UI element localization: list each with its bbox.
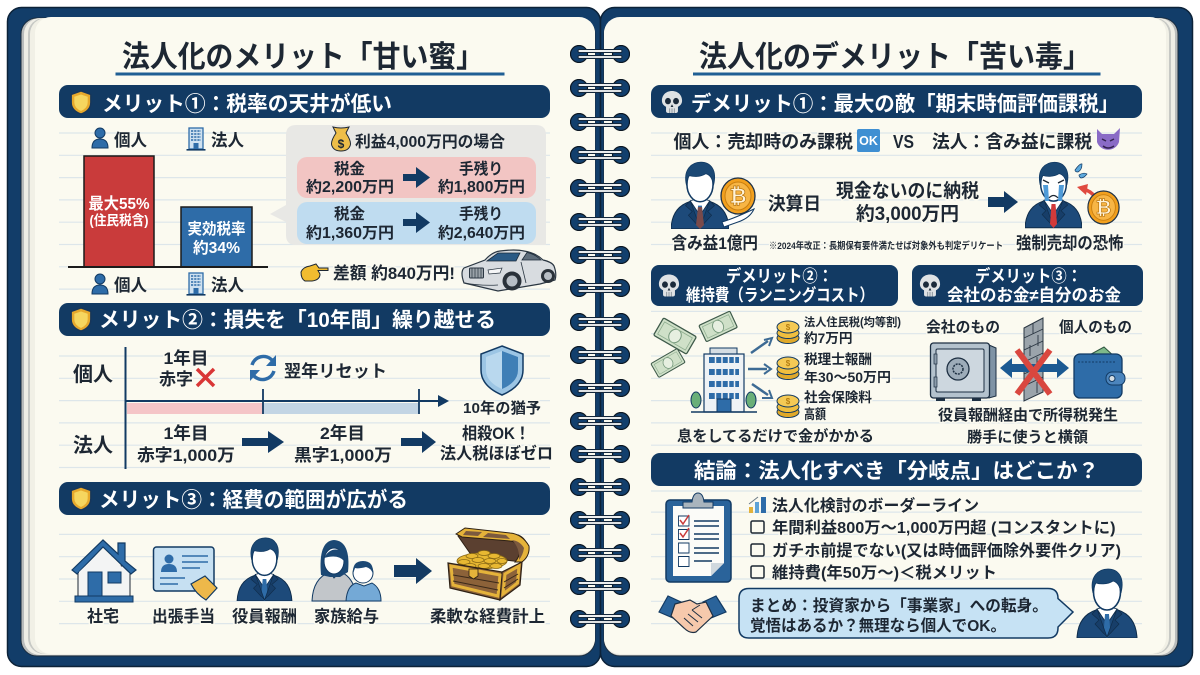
left notebook cover [8, 8, 600, 666]
scenario: unrealized gains: 決算日 [768, 193, 821, 214]
icon: office building [691, 348, 757, 412]
panel: company money vs personal money: 勝手に使うと横領 [967, 428, 1088, 446]
labels: 家族給与 [314, 606, 379, 626]
corporation sequence: 赤字1,000万 [137, 446, 235, 465]
corporation sequence [137, 423, 553, 465]
heading: merit 3: メリット③：経費の範囲が広がる [99, 488, 408, 512]
icon: bar chart [749, 497, 766, 513]
heading: demerit 1: デメリット①：最大の敵「期末時価評価課税」 [691, 92, 1119, 116]
legend top: 法人 [211, 131, 244, 150]
title: merits: 法人化のメリット「甘い蜜」 [122, 41, 484, 74]
icon: wallet [1074, 347, 1125, 398]
heading: demerit 3 [912, 265, 1143, 306]
bar: individual 55% [84, 156, 154, 267]
checklist: 維持費(年50万〜)＜税メリット [772, 563, 997, 582]
icon: skull [920, 274, 940, 296]
callout: summary speech bubble [739, 588, 1073, 638]
heading: demerit 2: デメリット②： [726, 266, 833, 286]
icon: house [72, 540, 136, 602]
left page paper stack [21, 17, 595, 656]
bar: individual 55%: 最大55% [88, 195, 150, 213]
heading: demerit 2: 維持費（ランニングコスト） [686, 285, 874, 305]
red cross [1017, 350, 1050, 394]
icon: flying bills [651, 311, 737, 378]
row: individual result: 約1,800万円 [438, 178, 525, 196]
callout: difference 8.4 million: 差額 約840万円! [333, 264, 455, 283]
row: corporation result [297, 202, 536, 244]
legend bottom: 法人 [211, 276, 244, 295]
legend top [92, 128, 244, 151]
arrow [394, 558, 432, 584]
labels: 柔軟な経費計上 [430, 607, 545, 626]
comparison line: VS [893, 132, 914, 152]
icon: refresh [250, 355, 276, 381]
right page paper stack [604, 17, 1178, 656]
corporation sequence: 相殺OK！ [462, 424, 530, 443]
panel: company money vs personal money [926, 318, 1132, 446]
icon: brick wall [1024, 318, 1043, 401]
panel: profit 40 million example: 利益4,000万円の場合 [355, 132, 505, 151]
icon: gold shield [71, 91, 91, 114]
bar: corporation 34%: 約34% [193, 239, 240, 257]
heading: conclusion [651, 453, 1142, 486]
icon: gold shield [71, 308, 91, 331]
labels [87, 606, 545, 626]
heading: conclusion: 結論：法人化すべき「分岐点」はどこか？ [694, 460, 1099, 483]
icon: travel allowance card [154, 547, 217, 600]
footnote: ※2024年改正：長期保有要件満たせば対象外も判定デリケート [769, 240, 1003, 252]
title: demerits: 法人化のデメリット「苦い毒」 [699, 40, 1091, 74]
scenario: unrealized gains: 強制売却の恐怖 [1016, 233, 1124, 253]
heading: merit 2 [59, 303, 550, 336]
comparison line: 個人：売却時のみ課税 [674, 132, 853, 152]
individual first year loss: 1年目 [164, 348, 208, 368]
row: corporation result: 手残り [459, 204, 503, 223]
scenario: unrealized gains: 含み益1億円 [672, 234, 758, 253]
heading: demerit 2 [651, 265, 898, 306]
comparison line [674, 128, 1120, 152]
icon: luxury car [462, 250, 556, 291]
callout: summary speech bubble: 覚悟はあるか？無理なら個人でOK。 [750, 616, 1006, 635]
checklist: 法人化検討のボーダーライン [772, 496, 979, 515]
row: corporation result: 税金 [334, 204, 365, 223]
cost list: 高額 [804, 406, 826, 422]
heading: merit 1: メリット①：税率の天井が低い [102, 92, 392, 116]
icon: crying man [1025, 162, 1119, 228]
cost list: 法人住民税(均等割) [804, 315, 901, 329]
icon: coins [777, 321, 799, 418]
double arrow [1000, 358, 1069, 378]
scenario: unrealized gains: 現金ないのに納税 [836, 180, 979, 202]
cost list: 年30〜50万円 [804, 369, 891, 385]
labels: 役員報酬 [232, 607, 297, 626]
icon: pointing hand [301, 264, 328, 281]
heading: merit 2: メリット②：損失を「10年間」繰り越せる [99, 309, 496, 332]
individual first year loss [159, 348, 214, 389]
icon: clipboard [666, 493, 731, 582]
bar: individual 55%: (住民税含) [90, 212, 148, 228]
icon: devil [1097, 128, 1120, 150]
row: corporation result: 約2,640万円 [438, 224, 525, 242]
scenario: unrealized gains [671, 162, 1124, 253]
heading: merit 3 [59, 482, 550, 515]
checklist [749, 496, 1121, 582]
icon: skull [662, 91, 682, 113]
chart: loss carry-forward timeline: 法人 [73, 434, 113, 457]
icon: treasure chest [448, 528, 529, 600]
cost list: 約7万円 [804, 330, 852, 346]
icon: executive [237, 538, 292, 601]
callout: difference 8.4 million [301, 250, 556, 291]
panel: running costs [651, 311, 901, 445]
heading: merit 1 [59, 85, 550, 118]
panel: running costs: 息をしてるだけで金がかかる [677, 427, 874, 445]
callout: summary speech bubble: まとめ：投資家から「事業家」への転身。 [750, 596, 1048, 615]
row: individual result [297, 157, 536, 198]
checklist: 年間利益800万〜1,000万円超 (コンスタントに) [772, 518, 1116, 537]
spiral binding rings [570, 46, 630, 628]
icon: money bag: $ [338, 137, 345, 151]
panel: profit 40 million example [270, 125, 546, 245]
cost list: 社会保険料 [804, 389, 873, 405]
chart: loss carry-forward timeline: 個人 [73, 363, 113, 386]
icon: safe [930, 343, 996, 401]
chart: loss carry-forward timeline: 翌年リセット [284, 361, 387, 381]
labels: 出張手当 [152, 606, 215, 626]
expense items [72, 528, 545, 626]
chart: loss carry-forward timeline: 10年の猶予 [463, 399, 541, 417]
corporation sequence: 2年目 [320, 423, 365, 443]
row: corporation result: 約1,360万円 [306, 224, 394, 242]
corporation sequence: 法人税ほぼゼロ [440, 443, 553, 463]
legend bottom [92, 273, 244, 296]
icon: handshake [659, 596, 726, 632]
icon: OK [857, 129, 880, 152]
icon: man with bitcoin [671, 162, 755, 229]
legend bottom: 個人 [114, 276, 147, 295]
chart: tax rate bars [68, 128, 268, 296]
icon: gold shield [71, 487, 91, 510]
bar: corporation 34% [181, 207, 252, 267]
cost list [804, 315, 901, 422]
chart: loss carry-forward timeline [73, 346, 553, 469]
arrow [988, 191, 1018, 213]
icon: businessman [1077, 569, 1137, 638]
cost arrows [748, 338, 772, 398]
checklist: ガチホ前提でない(又は時価評価除外要件クリア) [772, 541, 1121, 560]
row: individual result: 手残り [459, 159, 503, 178]
comparison line: 法人：含み益に課税 [932, 132, 1092, 152]
icon: blue shield [481, 346, 523, 395]
bar: corporation 34%: 実効税率 [188, 220, 246, 238]
icon: money bag [332, 127, 350, 151]
legend top: 個人 [114, 131, 147, 150]
corporation sequence: 1年目 [164, 423, 208, 443]
right notebook cover [600, 8, 1192, 666]
icon: OK: OK [859, 134, 878, 148]
cost list: 税理士報酬 [804, 351, 872, 367]
individual first year loss: 赤字 [159, 370, 193, 389]
icon: family [312, 540, 381, 601]
heading: demerit 1 [651, 85, 1142, 118]
panel: company money vs personal money: 個人のもの [1059, 319, 1132, 336]
heading: demerit 3: デメリット③： [975, 266, 1082, 286]
corporation sequence: 黒字1,000万 [294, 446, 392, 465]
heading: demerit 3: 会社のお金≠自分のお金 [947, 285, 1121, 305]
row: individual result: 税金 [334, 159, 365, 178]
scenario: unrealized gains: 約3,000万円 [856, 203, 959, 225]
row: individual result: 約2,200万円 [306, 178, 394, 196]
labels: 社宅 [87, 607, 119, 626]
timeline bar [126, 389, 449, 414]
panel: company money vs personal money: 役員報酬経由で所得税発生 [938, 406, 1118, 424]
icon: skull [659, 274, 679, 296]
panel: company money vs personal money: 会社のもの [926, 319, 1000, 336]
